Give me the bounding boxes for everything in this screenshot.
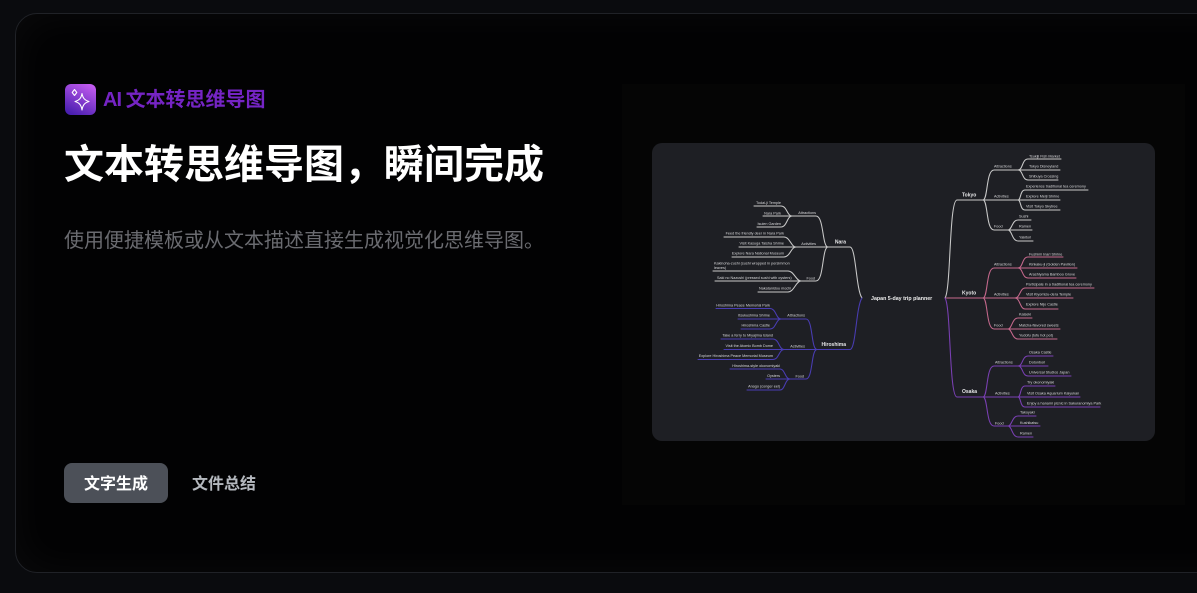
branch: Osaka: Osaka Castle <box>1029 350 1052 354</box>
branch: Nara: Isuien Garden <box>757 222 781 226</box>
central topic: Japan 5-day trip planner <box>871 296 932 302</box>
branch: Osaka: Ramen <box>1020 432 1032 436</box>
tab: file summary: 文件总结 <box>192 476 256 493</box>
branch: Nara: Visit Kasuga Taisha Shrine <box>740 242 784 246</box>
branch: Kyoto <box>945 252 1094 339</box>
tab: text generation (active): 文字生成 <box>84 476 148 493</box>
branch: Hiroshima: Explore Hiroshima Peace Memorial Museum <box>699 354 773 358</box>
branch: Nara: Kakinoha-zushi (sushi wrapped in persimmon <box>714 262 790 266</box>
branch: Hiroshima: Itsukushima Shrine <box>738 314 770 318</box>
branch: Tokyo: Tokyo <box>962 192 976 198</box>
branch: Tokyo: Activities <box>994 194 1009 198</box>
branch: Tokyo: Explore Meiji Shrine <box>1026 194 1059 198</box>
branch: Osaka: Food <box>995 422 1004 426</box>
branch: Hiroshima: Anago (conger eel) <box>748 384 781 388</box>
branch: Hiroshima: Attractions <box>787 314 805 318</box>
branch: Hiroshima: Activities <box>790 344 805 348</box>
branch: Kyoto: Yudofu (tofu hot pot) <box>1019 334 1054 338</box>
branch: Nara: Explore Nara National Museum <box>732 252 784 256</box>
branch: Osaka: Enjoy a hanami picnic in Sakuranomiya Park <box>1027 402 1101 406</box>
branch: Osaka: Visit Osaka Aquarium Kaiyukan <box>1027 392 1079 396</box>
tab: text generation (active) <box>64 463 168 503</box>
branch: Tokyo <box>945 154 1088 298</box>
badge label: AI 文本转思维导图 <box>103 89 266 111</box>
branch: Nara: Feed the friendly deer in Nara Park <box>726 232 784 236</box>
branch: Hiroshima: Hiroshima <box>822 342 846 348</box>
branch: Kyoto: Activities <box>994 292 1009 296</box>
branch: Nara: Nara Park <box>764 211 781 215</box>
branch: Kyoto: Kaiseki <box>1019 312 1031 316</box>
branch: Kyoto: Attractions <box>994 262 1012 266</box>
branch: Tokyo: Visit Tokyo Skytree <box>1026 204 1058 208</box>
branch: Osaka: Osaka <box>962 389 977 395</box>
subtitle: 使用便捷模板或从文本描述直接生成视觉化思维导图。 <box>64 230 544 252</box>
branch: Tokyo: Food <box>994 224 1003 228</box>
branch: Tokyo: Tokyo Disneyland <box>1029 164 1058 168</box>
branch: Nara: Attractions <box>798 211 816 215</box>
branch: Osaka: Dotonbori <box>1029 360 1045 364</box>
branch: Kyoto: Kyoto <box>962 290 976 296</box>
branch: Kyoto: Explore Nijo Castle <box>1026 302 1058 306</box>
branch: Hiroshima: Hiroshima Peace Memorial Park <box>716 303 770 307</box>
branch: Osaka: Activities <box>995 392 1010 396</box>
branch: Tokyo: Attractions <box>994 164 1012 168</box>
branch: Kyoto: Fushimi Inari Shrine <box>1029 252 1062 256</box>
branch: Hiroshima: Visit the Atomic Bomb Dome <box>726 344 773 348</box>
branch: Osaka <box>945 298 1101 437</box>
branch: Kyoto: Kinkaku-ji (Golden Pavilion) <box>1029 262 1076 266</box>
branch: Hiroshima: Oysters <box>767 374 780 378</box>
branch: Nara: Todai-ji Temple <box>756 201 781 205</box>
mind map panel <box>652 143 1155 441</box>
branch: Tokyo: Shibuya Crossing <box>1029 174 1058 178</box>
branch: Osaka: Try okonomiyaki <box>1027 380 1054 384</box>
branch: Hiroshima: Food <box>795 374 804 378</box>
branch: Hiroshima <box>698 298 862 390</box>
branch: Tokyo: Tsukiji Fish Market <box>1029 154 1061 158</box>
icon: sparkle badge <box>65 84 96 115</box>
branch: Kyoto: Matcha-flavored sweets <box>1019 324 1059 328</box>
branch: Nara: leaves) <box>714 266 727 270</box>
branch: Nara: Nakatanidou mochi <box>759 286 791 290</box>
branch: Hiroshima: Hiroshima Castle <box>741 324 770 328</box>
branch: Nara: Nara <box>835 240 846 246</box>
branch: Kyoto: Participate in a traditional tea ceremony <box>1026 282 1092 286</box>
branch: Osaka: Kushikatsu <box>1020 421 1038 425</box>
branch: Tokyo: Experience traditional tea ceremony <box>1026 184 1086 188</box>
branch: Osaka: Universal Studios Japan <box>1029 370 1069 374</box>
branch: Nara: Activities <box>801 242 816 246</box>
branch: Kyoto: Visit Kiyomizu-dera Temple <box>1026 292 1071 296</box>
branch: Nara: Food <box>806 276 815 280</box>
branch: Tokyo: Sushi <box>1019 214 1029 218</box>
branch: Nara: Saki no Nazushi (pressed sushi with oysters) <box>717 276 792 280</box>
branch: Osaka: Takoyaki <box>1020 410 1035 414</box>
branch: Tokyo: Yakitori <box>1019 236 1031 240</box>
branch: Tokyo: Ramen <box>1019 224 1031 228</box>
branch: Kyoto: Food <box>994 324 1003 328</box>
branch: Kyoto: Arashiyama Bamboo Grove <box>1029 272 1075 276</box>
branch: Osaka: Attractions <box>995 360 1013 364</box>
title: 文本转思维导图，瞬间完成 <box>64 143 544 187</box>
branch: Hiroshima: Hiroshima-style okonomiyaki <box>732 364 780 368</box>
branch: Hiroshima: Take a ferry to Miyajima Island <box>722 334 773 338</box>
branch: Nara <box>713 201 862 298</box>
screenshot backdrop <box>622 84 1185 505</box>
